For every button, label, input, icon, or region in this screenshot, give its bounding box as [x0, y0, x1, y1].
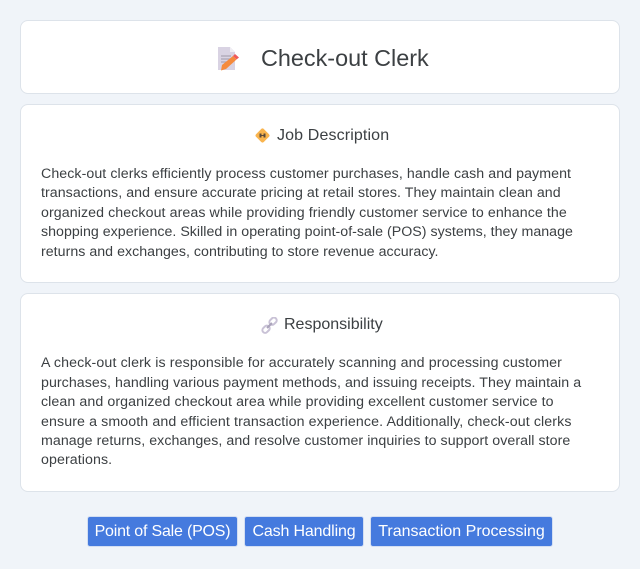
responsibility text: A check-out clerk is responsible for accurately scanning and processing customer: [41, 355, 562, 371]
responsibility text: manage returns, exchanges, and resolve customer inquiries to support overall store: [41, 433, 570, 449]
tag: point of sale: [87, 516, 238, 547]
description text: Check-out clerks efficiently process customer purchases, handle cash and payment: [41, 166, 571, 182]
heading: responsibility: Responsibility: [284, 316, 383, 333]
tag: cash handling: Cash Handling: [252, 523, 356, 540]
tag: transaction processing: [370, 516, 553, 547]
description text: [41, 166, 573, 260]
responsibility text: clean and organized checkout area while providing excellent customer service to: [41, 394, 554, 410]
title text: Check-out Clerk: [261, 45, 429, 71]
panel: title: [20, 20, 620, 94]
responsibility text: purchases, handling various payment methods, and issuing receipts. They maintain a: [41, 375, 581, 391]
description text: transactions, and ensure accurate pricing at retail stores. They maintain clean and: [41, 185, 561, 201]
icon: diamond sign: [256, 128, 270, 143]
tag: transaction processing: Transaction Processing: [378, 523, 545, 540]
responsibility text: operations.: [41, 452, 112, 468]
panel: job description: [20, 104, 620, 283]
panel: responsibility: [20, 293, 620, 492]
responsibility text: ensure a smooth and efficient transaction experience. Additionally, check-out clerks: [41, 414, 572, 430]
tag: cash handling: [244, 516, 364, 547]
tag: point of sale: Point of Sale (POS): [95, 523, 230, 540]
icon: link: [261, 317, 278, 334]
description text: returns and exchanges, contributing to store revenue accuracy.: [41, 244, 438, 260]
description text: organized checkout areas while providing friendly customer service to enhance the: [41, 205, 567, 221]
responsibility text: [41, 355, 582, 468]
heading: job description: Job Description: [277, 127, 389, 144]
description text: shopping experience. Skilled in operating point-of-sale (POS) systems, they manage: [41, 224, 573, 240]
icon: document with pencil: [218, 47, 239, 70]
